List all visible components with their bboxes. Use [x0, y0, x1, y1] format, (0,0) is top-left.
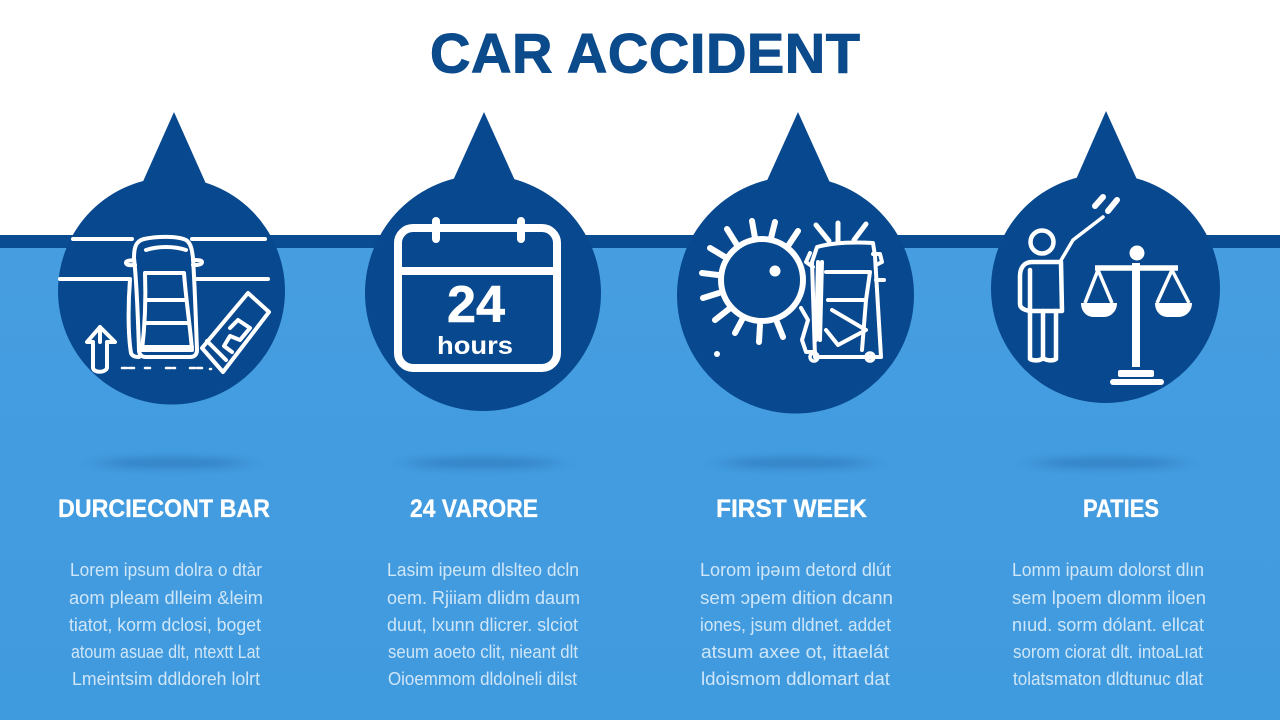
icon: person raising hand	[1020, 197, 1117, 360]
body text 1: tiatot, korm dclosi, boget	[69, 614, 261, 635]
drop marker 3	[677, 112, 914, 414]
body text 1: Lorem ipsum dolra o dtàr	[70, 559, 262, 580]
icon: calendar: 24	[447, 276, 505, 334]
lower blue background	[0, 248, 1280, 720]
heading 3: FIRST WEEK	[716, 495, 867, 523]
drop marker 4	[991, 111, 1220, 403]
icon: sun spot	[770, 266, 780, 276]
drop marker 2	[365, 112, 601, 411]
icon: small dot	[714, 351, 720, 357]
body text 3: sem ɔpem dition dcann	[700, 587, 893, 608]
ground shadow 1	[97, 457, 247, 469]
icon: car crash	[60, 237, 269, 372]
icon: scales of justice	[1081, 246, 1192, 385]
column 1: accident	[58, 112, 285, 689]
body text 1: Lmeintsim ddldoreh lolrt	[72, 668, 260, 689]
body text 3: Lorom ipəım detord dlút	[700, 559, 891, 580]
body text 4	[1012, 559, 1206, 689]
dark horizontal band	[0, 235, 1280, 248]
heading 2: 24 VARORE	[410, 495, 538, 523]
title: CAR ACCIDENT	[430, 22, 861, 84]
drop marker 1	[58, 112, 285, 404]
body text 2	[387, 559, 580, 689]
body text 1	[69, 559, 263, 689]
body text 3	[700, 559, 893, 689]
body text 1: aom pleam dlleim &leim	[69, 587, 263, 608]
body text 2: seum aoeto clit, nieant dlt	[388, 641, 578, 662]
body text 3: atsum axee ot, ittaelát	[701, 641, 889, 662]
body text 2: Oioemmom dldolneli dilst	[388, 668, 577, 689]
ground shadow 4	[1033, 457, 1183, 469]
icon: calendar: hours	[437, 332, 513, 360]
ground shadow 3	[721, 457, 871, 469]
icon: calendar	[398, 221, 557, 368]
body text 4: sem lpoem dlomm iloen	[1012, 587, 1206, 608]
body text 2: Lasim ipeum dlslteo dcln	[387, 559, 579, 580]
body text 4: sorom ciorat dlt. intoaLıat	[1013, 641, 1203, 662]
body text 4: nıud. sorm dólant. ellcat	[1012, 614, 1204, 635]
body text 1: atoum asuae dlt, ntextt Lat	[71, 641, 260, 662]
icon: sun and damaged car	[702, 221, 884, 361]
body text 3: ldoismom ddlomart dat	[701, 668, 890, 689]
ground shadow 2	[407, 457, 557, 469]
body text 2: duut, lxunn dlicrer. slciot	[387, 614, 578, 635]
column 2: 24 hours	[365, 112, 601, 689]
column 4: parties	[991, 111, 1220, 689]
body text 4: Lomm ipaum dolorst dlın	[1012, 559, 1204, 580]
heading 4: PATIES	[1083, 495, 1159, 523]
body text 2: oem. Rjiiam dlidm daum	[387, 587, 580, 608]
body text 4: tolatsmaton dldtunuc dlat	[1013, 668, 1203, 689]
body text 3: iones, jsum dldnet. addet	[700, 614, 891, 635]
heading 1: DURCIECONT BAR	[58, 495, 270, 523]
column 3: first week	[677, 112, 914, 689]
